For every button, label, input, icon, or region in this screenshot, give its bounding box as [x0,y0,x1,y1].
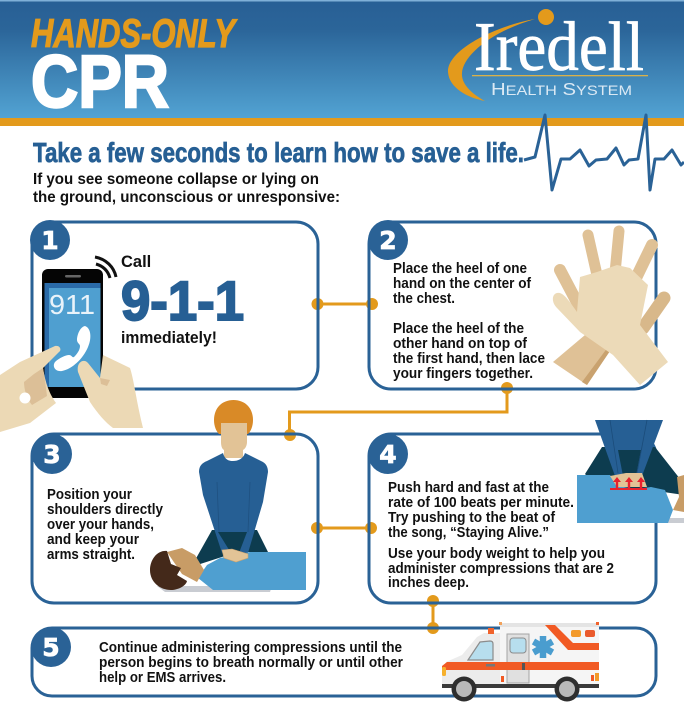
connector: step 1 to 2 [312,298,378,310]
intro text: the ground, unconscious or unresponsive: [33,189,340,206]
badge: 4 [368,434,408,474]
panel: step 2 [368,220,668,389]
text: step 2 instructions: your fingers together. [393,366,533,382]
title: CPR: CPR [31,40,169,123]
text: step 5 instructions: person begins to breath normally or until other [99,655,403,671]
text: step 2 instructions [393,261,545,382]
logo: Iredell Health System: Iredell [474,9,644,86]
badge: 5 [31,627,71,667]
badge: 4: 4 [379,440,397,469]
text: step 5 instructions: help or EMS arrives. [99,670,226,686]
text: step 4 instructions: inches deep. [388,575,469,591]
header banner [0,0,684,126]
badge: 2 [368,220,408,260]
text: step 2 instructions: Place the heel of the [393,321,524,337]
text: step 3 instructions [47,487,163,563]
text: step 3 instructions: shoulders directly [47,502,163,518]
logo: Iredell Health System: HEALTH SYSTEM [491,79,632,99]
heartbeat line [524,115,684,190]
badge: 3 [32,434,72,474]
text: step 3 instructions: and keep your [47,532,139,548]
badge: 3: 3 [43,440,61,469]
text: step 4 instructions [388,480,614,591]
title: hands-only: HANDS-ONLY [31,12,238,56]
text: step 4 instructions: administer compressions that are 2 [388,561,614,577]
illustration: rescuer over patient [150,400,306,592]
intro text: If you see someone collapse or lying on [33,171,319,188]
text: step 5 instructions [99,640,403,686]
connector: step 4 to 5 [427,595,439,634]
illustration: compression close-up [577,420,684,523]
icon: phone with hands [0,269,143,432]
connector: step 3 to 4 [311,522,377,534]
text: step 2 instructions: the chest. [393,291,455,307]
badge: 2: 2 [379,226,397,255]
badge: 5: 5 [42,633,60,662]
text: step 4 instructions: Push hard and fast at the [388,480,549,496]
text: step 2 instructions: Place the heel of one [393,261,527,277]
text: step 5 instructions: Continue administering compressions until the [99,640,402,656]
text: step 3 instructions: over your hands, [47,517,154,533]
text: step 2 instructions: hand on the center of [393,276,531,292]
panel: step 1 [0,220,318,432]
text: step 4 instructions: Use your body weight to help you [388,546,605,562]
text: 9-1-1: 9-1-1 [121,269,244,332]
panel: step 5 [31,622,656,702]
text: step 2 instructions: other hand on top of [393,336,527,352]
panel: step 4 [368,420,684,603]
text: immediately: immediately! [121,329,217,347]
text: step 4 instructions: Try pushing to the beat of [388,510,555,526]
badge: 1: 1 [41,226,59,255]
text: step 3 instructions: Position your [47,487,132,503]
text: step 4 instructions: rate of 100 beats per minute. [388,495,574,511]
connector: step 2 to 3 [284,382,513,441]
text: call: Call [121,253,151,271]
text: step 2 instructions: the first hand, then lace [393,351,545,367]
heading: take a few seconds: Take a few seconds to learn how to save a life. [33,137,524,168]
illustration: ambulance [442,622,599,702]
icon: interlaced hands [553,231,668,385]
text: step 4 instructions: the song, “Staying Alive.” [388,525,549,541]
icon: phone with hands: 911 [49,289,95,320]
intro text [33,171,340,206]
panel: step 3 [32,400,318,603]
icon: signal waves [95,257,116,278]
text: step 3 instructions: arms straight. [47,547,135,563]
badge: 1 [30,220,70,260]
